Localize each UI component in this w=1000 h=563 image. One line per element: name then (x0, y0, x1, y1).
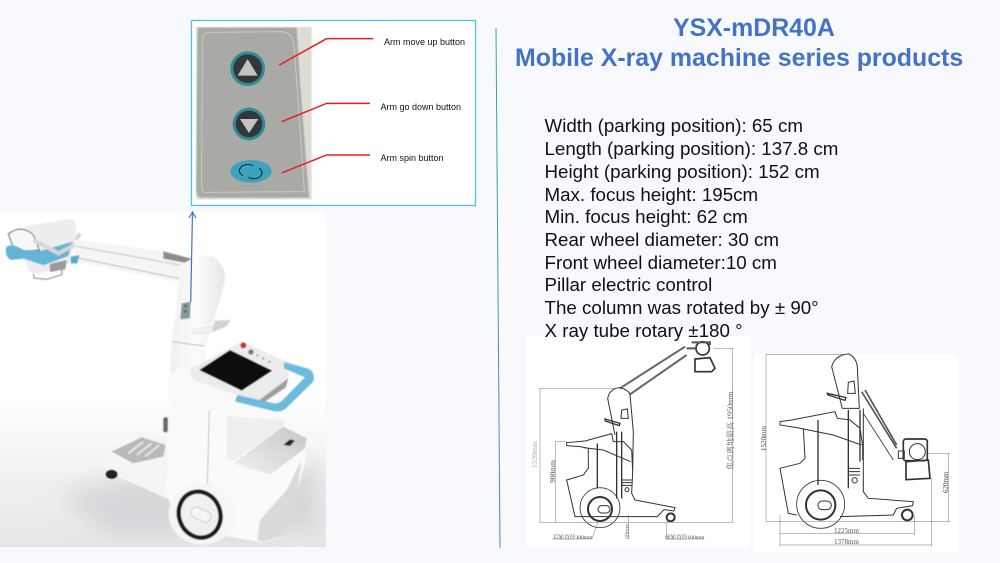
text block: specifications: Max. focus height: 195cm (544, 184, 758, 204)
dimension label: 1225: 1225mm (834, 527, 859, 535)
dimension label: 900: 900mm (548, 460, 557, 483)
text block: specifications: X ray tube rotary ±180 ° (544, 320, 743, 341)
floor shadow (60, 460, 320, 537)
telescopic arm (71, 239, 193, 283)
text block: specifications: The column was rotated by ± 90° (544, 297, 819, 318)
dimension label: 60: 60mm (625, 523, 631, 539)
label: arm up: Arm move up button (384, 37, 465, 47)
drawing: machine outline (780, 354, 930, 528)
leader line: spin (282, 155, 370, 173)
drawing: machine outline (567, 342, 715, 528)
icon: up button (230, 51, 265, 86)
photo: button keypad (196, 27, 373, 199)
text block: specifications: Pillar electric control (544, 274, 712, 295)
panel: button close-up (192, 20, 476, 206)
text block: specifications (544, 115, 838, 341)
dimension label: 620: 620mm (942, 471, 950, 493)
title: model name: YSX-mDR40A (673, 14, 835, 42)
rear wheel (168, 484, 224, 544)
text block: specifications: Length (parking position): 137.8 cm (544, 138, 838, 159)
label: arm down: Arm go down button (380, 102, 461, 112)
control screen (190, 341, 291, 405)
blue handle (235, 362, 314, 412)
drawing: dimension lines (539, 348, 733, 539)
text block: specifications: Front wheel diameter:10 cm (544, 252, 777, 273)
label: arm spin: Arm spin button (380, 153, 444, 163)
panel: side view drawing parked (754, 354, 957, 552)
dimension label: rear wheel: 后轮直径300mm (553, 533, 593, 541)
text block: specifications: Min. focus height: 62 cm (544, 206, 748, 227)
leader line: down (282, 103, 370, 122)
base platform (99, 417, 172, 500)
illustration: mobile X-ray machine (6, 219, 320, 545)
dimension label: front wheel: 前轮直径100mm (665, 533, 705, 541)
drawing: dimension lines (766, 354, 950, 546)
arrow: from pillar keypad to close-up (189, 212, 196, 302)
dimension label: 1520: 1520mm (530, 441, 539, 468)
icon: spin button (230, 160, 272, 183)
text block: specifications: Rear wheel diameter: 30 cm (544, 229, 779, 250)
leader line: up (279, 39, 373, 65)
panel: machine photo (0, 212, 326, 547)
pillar column (170, 256, 231, 373)
text block: specifications: Width (parking position): 65 cm (544, 115, 803, 136)
text block: specifications: Height (parking position): 152 cm (544, 161, 820, 182)
dimension label: 1950: 焦点离地最高 1950mm (725, 391, 735, 470)
cart body (167, 365, 307, 542)
divider line (496, 28, 500, 548)
icon: down button (233, 108, 265, 140)
panel: side view drawing extended (527, 336, 750, 548)
dimension label: 1520: 1520mm (760, 426, 768, 451)
x-ray tube head (6, 219, 80, 279)
title: product series: Mobile X-ray machine series products (515, 44, 963, 72)
dimension label: 1378: 1378mm (834, 538, 859, 546)
